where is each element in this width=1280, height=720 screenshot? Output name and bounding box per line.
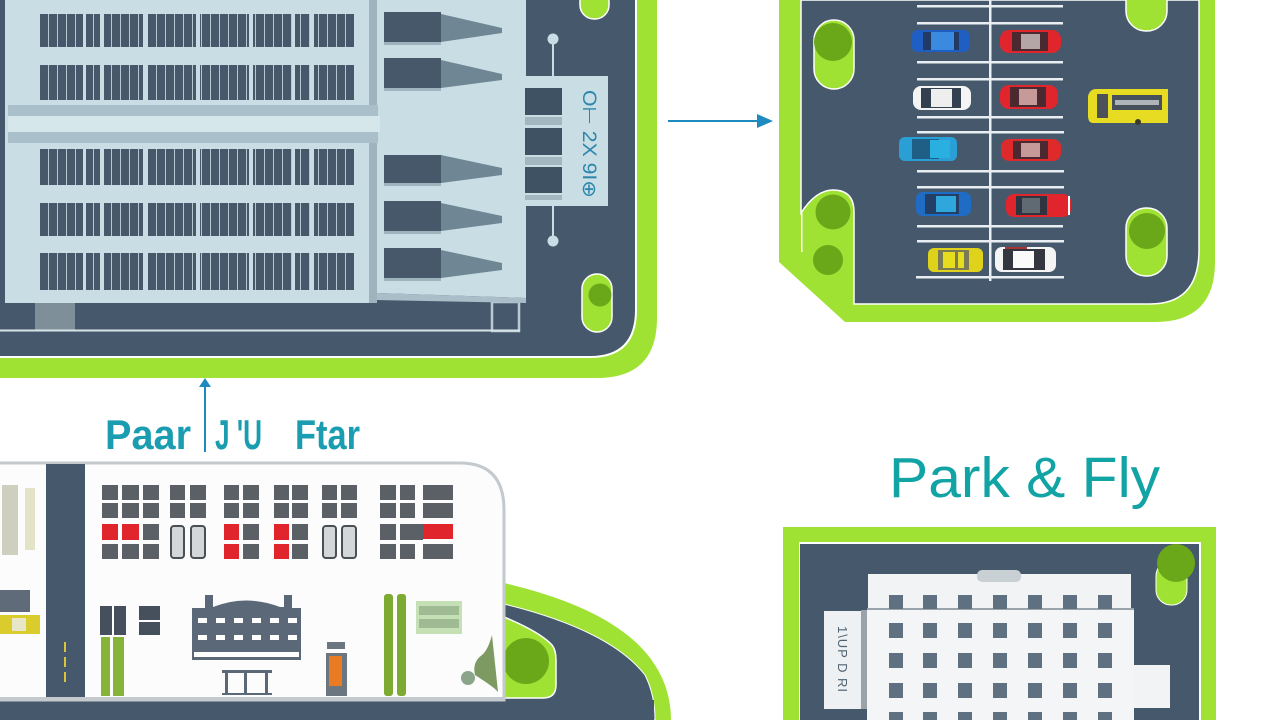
parking bay lines: [916, 0, 1064, 281]
orange kiosk: [326, 642, 347, 696]
car: red: [1001, 139, 1061, 161]
sign block: [525, 76, 608, 206]
heading: garbled panel title: Paar: [105, 411, 191, 458]
building main block: [5, 0, 526, 303]
tree island: [503, 617, 556, 698]
building shell: [0, 463, 504, 700]
car: red and white: [1006, 194, 1071, 217]
tree island: [1156, 544, 1195, 605]
arrow: terminal to car park: [668, 114, 773, 128]
panel: hotel top view: [783, 527, 1216, 720]
hotel windows: [889, 595, 1112, 720]
tree islands: [813, 0, 1167, 276]
boarding gates: [384, 12, 502, 281]
bench: [222, 670, 272, 695]
curved road: [0, 583, 671, 720]
hotel wing sign: 1\UP D RI: [835, 626, 850, 692]
heading: garbled panel title: J 'U: [215, 411, 262, 458]
tree island top: [580, 0, 609, 19]
shrub: [461, 635, 498, 692]
red cars in windows: [102, 524, 453, 559]
small building icon: [192, 595, 301, 660]
doors and green columns: [100, 606, 160, 696]
bus: yellow: [1088, 89, 1168, 125]
arrow: up to terminal: [199, 378, 211, 452]
heading: garbled panel title: [105, 411, 360, 458]
car: blue cyan: [916, 192, 971, 216]
heading: garbled panel title: Ftar: [295, 411, 360, 458]
window grid: [102, 485, 453, 559]
lot surface with green border: [783, 527, 1216, 720]
car: white: [995, 247, 1056, 272]
white vehicles in windows: [171, 526, 356, 558]
hotel wing sign: [824, 611, 861, 709]
left edge details: [0, 485, 40, 634]
window rows: [40, 14, 354, 290]
lamp posts: [548, 34, 558, 246]
car: white: [913, 86, 971, 110]
lot surface with green border: [779, 0, 1215, 322]
panel: road and island bottom: [0, 583, 671, 720]
green sign: [416, 601, 462, 634]
car: yellow taxi: [928, 248, 983, 272]
lot surface with green border: [0, 0, 657, 378]
dark road strip: [46, 464, 85, 697]
tree island lower: [582, 274, 612, 332]
car: red: [1000, 30, 1061, 53]
sign text: O⊢ 2X 9I⊕: [578, 90, 599, 198]
car: red: [1000, 85, 1058, 109]
heading: Park & Fly: Park & Fly: [889, 446, 1161, 510]
hotel body: [861, 570, 1170, 720]
panel: terminal top view: [0, 0, 657, 378]
car: cyan: [899, 137, 957, 161]
green columns right: [384, 594, 406, 696]
car: blue: [912, 30, 969, 52]
panel: car park: [779, 0, 1215, 322]
lot lower outline: [0, 302, 520, 332]
panel: terminal elevation: [0, 463, 504, 701]
